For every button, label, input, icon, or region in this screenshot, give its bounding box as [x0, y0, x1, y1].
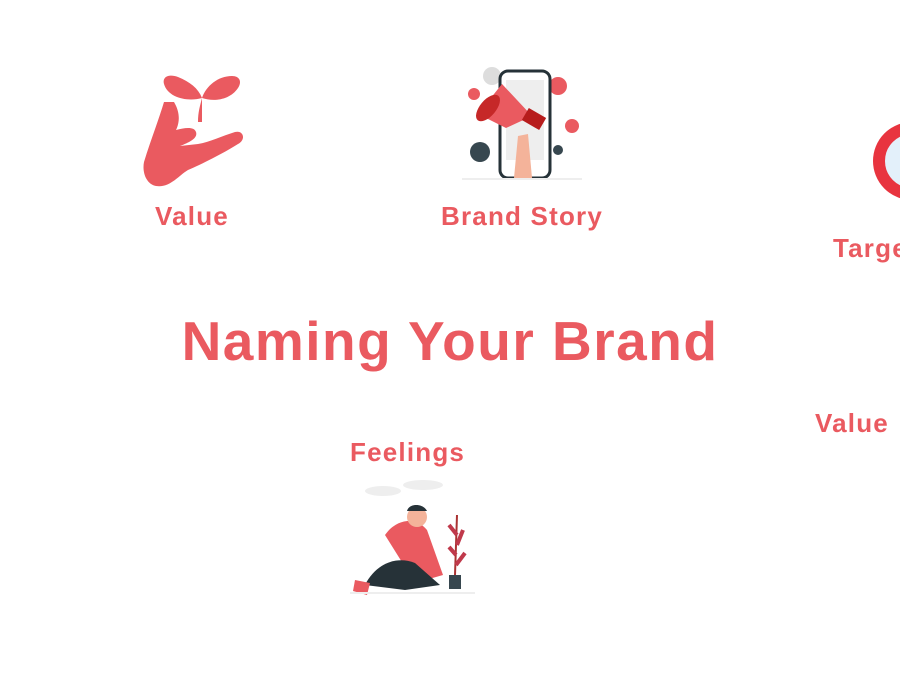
label: Value (right, cut off): Value — [815, 408, 889, 438]
title: Naming Your Brand — [182, 310, 718, 372]
label: Brand Story: Brand Story — [441, 201, 603, 231]
icon: target — [873, 124, 900, 198]
icon: hand with sprout — [144, 76, 243, 186]
icon: sad person sitting — [350, 480, 475, 595]
label: Value: Value — [155, 201, 229, 231]
label: Feelings: Feelings — [350, 437, 465, 467]
icon: phone with megaphone — [462, 67, 582, 180]
